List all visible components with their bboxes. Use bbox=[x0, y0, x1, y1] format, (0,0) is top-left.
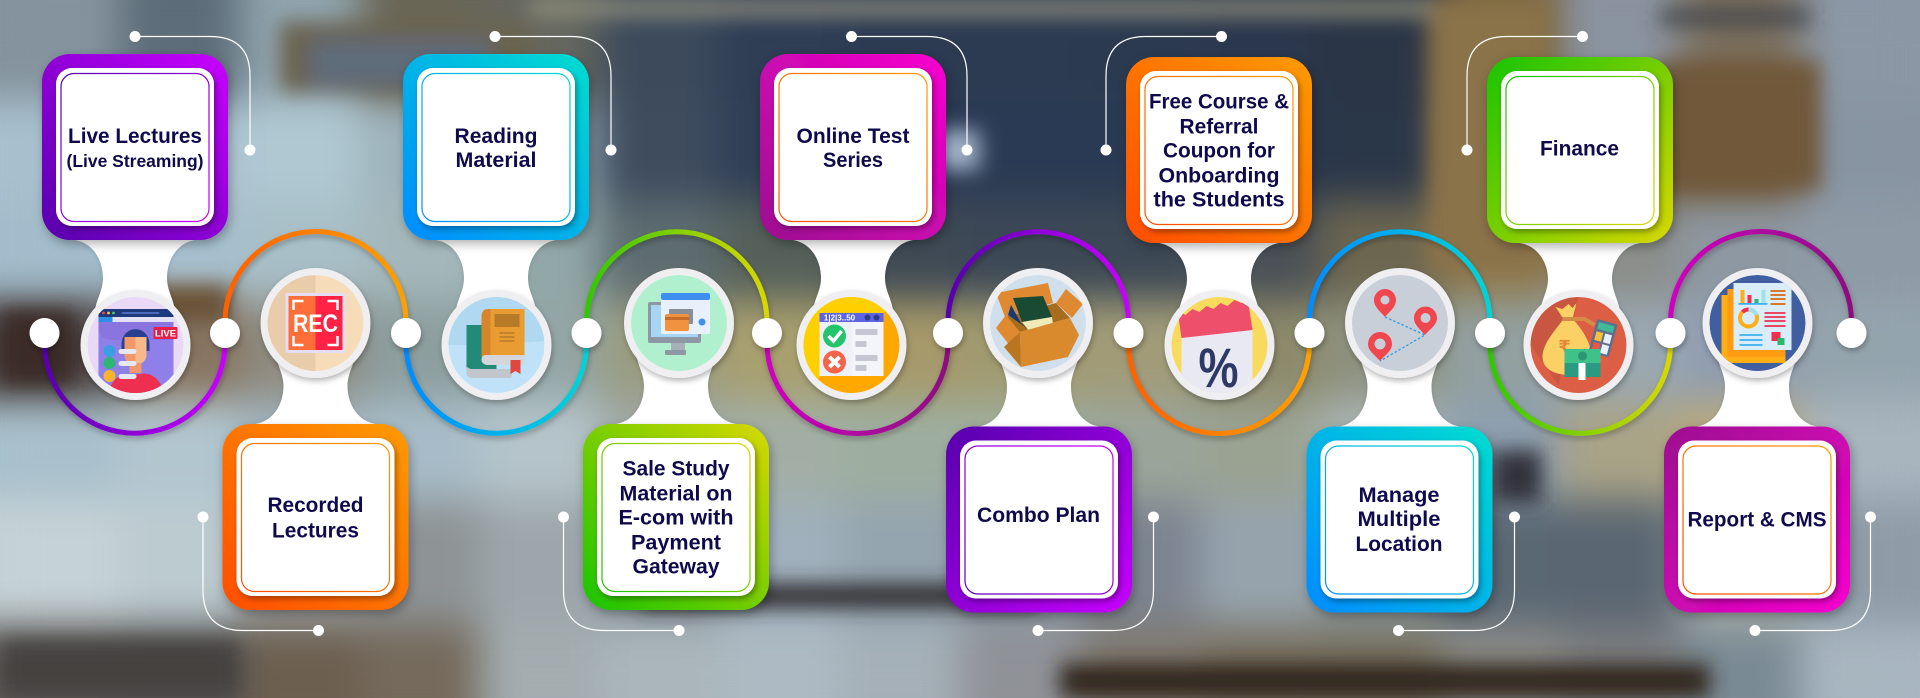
icon: record: REC bbox=[293, 310, 338, 338]
card: Sale Study Material: E-com with bbox=[618, 506, 734, 530]
icon: test checklist bbox=[796, 290, 906, 400]
icon: combo box bbox=[983, 268, 1093, 378]
card: Manage Multiple Location: Location bbox=[1356, 533, 1442, 556]
icon: finance money bbox=[1524, 290, 1634, 400]
connector: Combo Plan bbox=[1032, 512, 1159, 636]
icon: record bbox=[260, 268, 370, 378]
arc: blue bbox=[406, 333, 586, 433]
connector: Live Lectures bbox=[130, 31, 256, 156]
icon: study material payment bbox=[624, 268, 734, 378]
card: Free Course and Referral Coupon: Coupon for bbox=[1163, 140, 1275, 162]
card: Finance bbox=[1487, 57, 1673, 243]
card: Free Course and Referral Coupon: Onboarding bbox=[1158, 164, 1280, 188]
arc: magenta bbox=[767, 333, 948, 434]
card: Reading Material: Reading bbox=[454, 125, 538, 148]
connector: Report and CMS bbox=[1750, 512, 1876, 636]
card: Manage Multiple Location bbox=[1306, 426, 1492, 612]
card: Online Test Series bbox=[760, 54, 946, 240]
card: Combo Plan bbox=[946, 426, 1132, 612]
arc: lime bbox=[1490, 333, 1670, 433]
card: Reading Material bbox=[403, 54, 589, 240]
arc: purple bbox=[44, 333, 225, 433]
timeline arcs bbox=[44, 232, 1852, 434]
card: Free Course and Referral Coupon: Free Course & bbox=[1149, 90, 1289, 114]
white connector necks between cards and icons bbox=[75, 240, 1817, 426]
card: Report and CMS bbox=[1664, 426, 1850, 612]
card: Manage Multiple Location: Multiple bbox=[1358, 508, 1440, 531]
icon: discount coupon bbox=[1164, 290, 1274, 400]
arc: amber bbox=[1128, 333, 1310, 434]
icon: finance money: ₹ bbox=[1558, 337, 1571, 358]
timeline node dots bbox=[30, 318, 1866, 348]
icon: map pins bbox=[1345, 268, 1455, 378]
callout connector lines bbox=[130, 31, 1876, 636]
card: Online Test Series: Online Test bbox=[796, 125, 910, 148]
icon: discount coupon: % bbox=[1198, 336, 1238, 399]
card: Recorded Lectures: Lectures bbox=[272, 520, 359, 542]
card: Manage Multiple Location: Manage bbox=[1358, 484, 1440, 507]
card: Recorded Lectures: Recorded bbox=[268, 494, 364, 517]
connector: Free Course bbox=[1100, 31, 1227, 156]
card: Sale Study Material bbox=[583, 424, 769, 610]
icon: live lecture: LIVE bbox=[155, 328, 176, 340]
arc: green bbox=[586, 232, 767, 333]
icon: test checklist: 1|2|3..50 bbox=[824, 314, 856, 322]
card: Sale Study Material: Gateway bbox=[632, 556, 720, 578]
card: Live Lectures bbox=[42, 54, 228, 240]
card: Free Course and Referral Coupon bbox=[1126, 57, 1312, 243]
connector: Reading Material bbox=[490, 31, 616, 156]
card: Online Test Series: Series bbox=[823, 149, 883, 172]
card: Report and CMS: Report & CMS bbox=[1688, 508, 1826, 532]
arc: sky bbox=[1310, 232, 1490, 333]
card: Live Lectures: (Live Streaming) bbox=[66, 151, 204, 171]
arc: violet bbox=[948, 232, 1128, 333]
icon: books bbox=[442, 290, 552, 400]
card: Sale Study Material: Sale Study bbox=[622, 458, 730, 480]
arc: plum bbox=[1670, 232, 1852, 333]
card: Finance: Finance bbox=[1540, 138, 1619, 160]
card: Free Course and Referral Coupon: the Students bbox=[1154, 188, 1284, 212]
connector: Sale Study Material bbox=[558, 512, 684, 636]
connector: Recorded Lectures bbox=[198, 512, 324, 636]
card: Sale Study Material: Payment bbox=[631, 532, 721, 554]
connector: Finance bbox=[1462, 31, 1588, 156]
card: Live Lectures: Live Lectures bbox=[68, 125, 202, 148]
connector: Online Test Series bbox=[846, 31, 972, 156]
card: Recorded Lectures bbox=[222, 424, 408, 610]
card: Reading Material: Material bbox=[456, 149, 536, 172]
card: Combo Plan: Combo Plan bbox=[977, 504, 1100, 527]
arc: orange bbox=[225, 232, 406, 333]
connector: Manage Multiple Location bbox=[1393, 512, 1520, 636]
card: Sale Study Material: Material on bbox=[620, 482, 732, 506]
icon: live lecture bbox=[80, 290, 190, 400]
icon: report documents bbox=[1702, 268, 1812, 378]
card: Free Course and Referral Coupon: Referral bbox=[1180, 116, 1258, 138]
